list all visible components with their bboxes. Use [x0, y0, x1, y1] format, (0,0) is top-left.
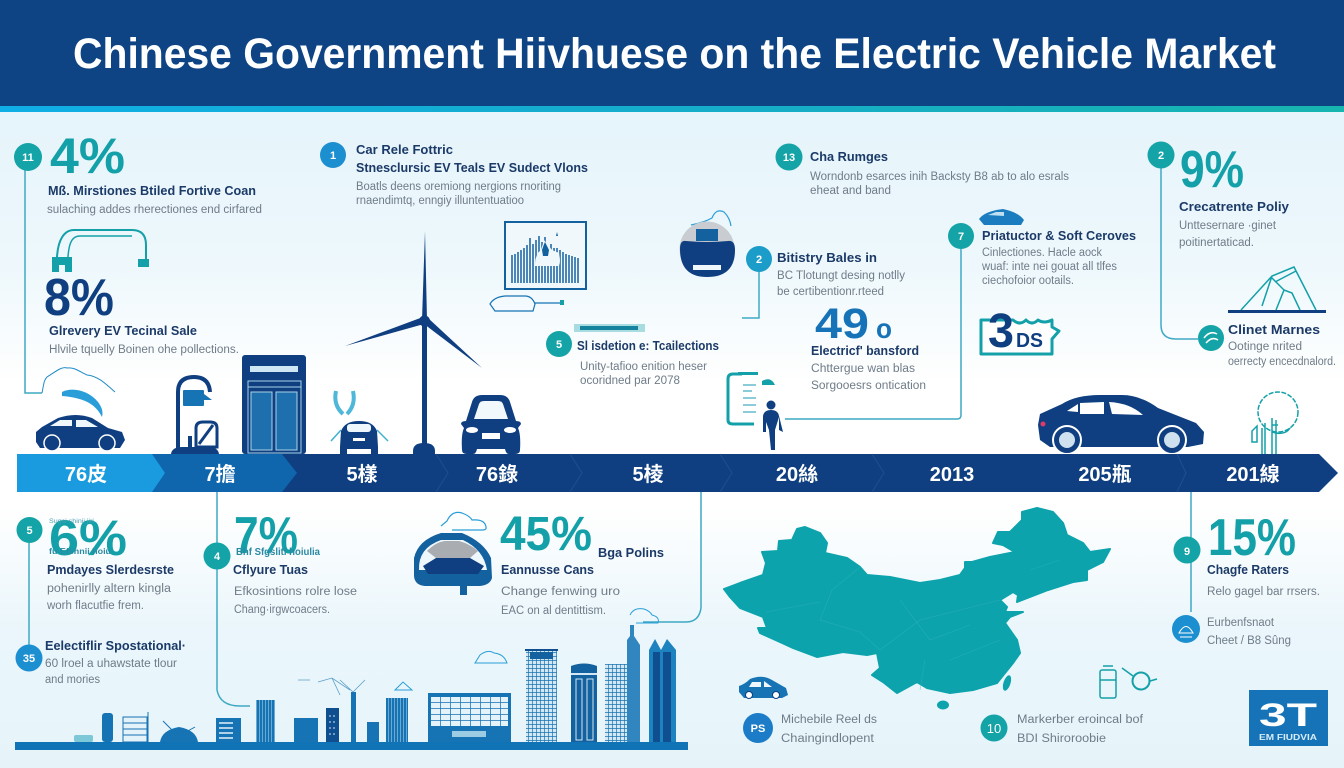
stat block: 45%: Bga Polins — [598, 546, 664, 560]
stat block: 6% standards: 5 — [26, 525, 33, 537]
stat block: 49%: o — [876, 313, 892, 344]
text block: battery sales: Bitistry Bales in — [777, 251, 877, 265]
icon: building — [242, 355, 306, 454]
stat block: 9% policy: Crecatrente Poliy — [1179, 200, 1289, 214]
text block: market 10: BDI Shiroroobie — [1017, 733, 1106, 745]
icon: battery and cable — [1100, 666, 1157, 698]
text block: market 10 — [980, 714, 1144, 745]
timeline arrow: 76錄 — [476, 462, 518, 486]
stat block: 15% charge rates: 15% — [1208, 509, 1296, 567]
stat block: 8% sales: 8% — [44, 269, 114, 327]
stat block: 8% sales: Glrevery EV Tecinal Sale — [49, 324, 197, 338]
stat block: 49%: Chttergue wan blas — [811, 363, 915, 375]
stat block: 49%: Electricf' bansford — [811, 344, 919, 358]
text block: practor and soft cerves: ciechofoior ootails. — [982, 275, 1074, 287]
stat block: 7% charging: 7% — [234, 507, 298, 565]
text block: climate markets: Ootinge nrited — [1228, 341, 1302, 353]
stat block: 15% charge rates: Relo gagel bar rrsers. — [1207, 586, 1320, 598]
stat block: 7% charging: 4 — [214, 551, 221, 563]
timeline arrow: 5樣 — [346, 463, 378, 486]
stat block: 45% — [500, 508, 664, 617]
logo — [1249, 690, 1328, 746]
stat block: 7% charging: Bhf Sfgsliti hoiulia — [236, 547, 320, 558]
text block: practor and soft cerves — [948, 209, 1136, 287]
stat block: 8% sales — [44, 269, 239, 356]
icon: large sedan — [1038, 395, 1204, 454]
connectors — [25, 168, 1198, 706]
stat block: 7% charging: Cflyure Tuas — [233, 563, 308, 577]
map of China — [724, 508, 1110, 710]
text block: practor and soft cerves: wuaf: inte nei gouat all tlfes — [981, 261, 1117, 273]
icon: battery dome — [680, 211, 735, 277]
stat block: 9% policy — [1148, 141, 1289, 249]
stat block: 6% standards: 6% — [49, 510, 127, 566]
timeline arrow — [17, 454, 1338, 492]
icon: 3DS badge: DS — [1016, 330, 1043, 352]
stat block: 6% standards: pohenirlly altern kingla — [47, 583, 172, 595]
icon: car with cloud — [36, 368, 125, 451]
stat block: 8% sales: Hlvile tquelly Boinen ohe pollections. — [49, 344, 239, 356]
text block: chart and sing — [1172, 615, 1291, 647]
text block: electric stations: and mories — [45, 674, 100, 686]
icon: charging cable — [52, 230, 149, 272]
icon: document and person — [728, 372, 783, 450]
stat block: 4% milestones: sulaching addes rherectiones end cirfared — [47, 204, 262, 216]
text block: structural EV targets: rnaendimtq, enngiy illuntentuatioo — [356, 195, 524, 207]
stat block: 45%: EAC on al dentittism. — [501, 605, 606, 617]
text block: charging ranges — [776, 144, 1069, 197]
stat block: 4% milestones: 4% — [50, 128, 125, 184]
text block: transactions: Sl isdetion e: Tcailections — [577, 339, 719, 353]
timeline arrow: 20絲 — [776, 463, 818, 486]
text block: structural EV targets: Boatls deens oremiong nergions rnoriting — [356, 181, 561, 193]
logo: EM FIUDVIA — [1259, 733, 1317, 742]
text block: transactions: 5 — [556, 339, 562, 351]
stat block: 45%: Eannusse Cans — [501, 563, 594, 577]
title: Chinese Government Hiivhuese on the Electric Vehicle Market — [73, 30, 1276, 78]
icon: mountain — [1228, 267, 1326, 313]
icon: chart monitor — [490, 222, 586, 311]
icon: car front with cloud — [414, 512, 492, 595]
text block: electric stations: Eelectiflir Spostational· — [45, 639, 186, 653]
icon: small car front — [331, 391, 388, 454]
text block: electric stations — [16, 639, 186, 686]
stat block: 45%: Change fenwing uro — [501, 586, 620, 598]
timeline arrow: 5棱 — [632, 463, 664, 486]
timeline arrow: 7擔 — [204, 463, 236, 486]
icon: wind turbine — [345, 231, 482, 454]
text block: charging ranges: Cha Rumges — [810, 150, 888, 164]
stat block: 15% charge rates — [1174, 509, 1320, 598]
stat block: 15% charge rates: 9 — [1184, 546, 1190, 558]
icon: charging station — [171, 377, 219, 454]
text block: structural EV targets: 1 — [330, 150, 336, 162]
stat block: 45%: 45% — [500, 508, 592, 561]
stat block: 7% charging — [204, 507, 357, 616]
text block: climate markets: Clinet Marnes — [1228, 323, 1320, 337]
stat block: 4% milestones — [14, 128, 262, 216]
text block: transactions: Unity-tafioo enition heser — [580, 361, 707, 373]
text block: mobile reels: Michebile Reel ds — [781, 714, 877, 726]
text block: mobile reels: Chaingindlopent — [781, 733, 875, 745]
text block: battery sales: 2 — [756, 254, 762, 266]
timeline arrow: 201線 — [1226, 463, 1280, 486]
text block: charging ranges: 13 — [783, 152, 795, 164]
text block: climate markets — [1198, 323, 1336, 368]
stat block: 49%: 49 — [815, 300, 869, 348]
stat block: 9% policy: poitinertaticad. — [1179, 237, 1254, 249]
stat block: 4% milestones: 11 — [22, 152, 34, 164]
text block: battery sales: be certibentionr.rteed — [777, 286, 884, 298]
stat block: 6% standards: fu Efshnii hoiu — [49, 547, 111, 556]
stat block: 4% milestones: Mß. Mirstiones Btiled Fortive Coan — [48, 184, 256, 198]
timeline arrow: 2013 — [930, 464, 974, 486]
stat block: 15% charge rates: Chagfe Raters — [1207, 563, 1289, 577]
text block: charging ranges: Worndonb esarces inih Backsty B8 ab to alo esrals — [810, 171, 1069, 183]
stat block: 9% policy: 9% — [1180, 141, 1244, 199]
stat block: 6% standards: worh flacutfie frem. — [46, 600, 144, 612]
text block: transactions: ocoridned par 2078 — [580, 375, 680, 387]
timeline arrow: 76皮 — [65, 463, 107, 486]
timeline arrow: 205瓶 — [1078, 463, 1132, 486]
text block: battery sales: BC Tlotungt desing notlly — [777, 270, 905, 282]
logo: 3T — [1259, 697, 1318, 733]
text block: practor and soft cerves: Cinlectiones. Hacle aock — [982, 247, 1102, 259]
text block: mobile reels — [743, 713, 877, 745]
text block: electric stations: 60 lroel a uhawstate tlour — [45, 658, 177, 670]
icon: tree with charger — [1252, 392, 1298, 454]
text block: electric stations: 35 — [23, 653, 35, 665]
text block: market 10: 10 — [987, 721, 1001, 736]
stat block: 9% policy: Unttesernare ·ginet — [1179, 220, 1277, 232]
stat block: 6% standards — [16, 510, 174, 612]
stat block: 9% policy: 2 — [1158, 150, 1164, 162]
text block: charging ranges: eheat and band — [810, 185, 891, 197]
text block: practor and soft cerves: Priatuctor & Soft Ceroves — [982, 229, 1136, 243]
stat block: 7% charging: Efkosintions rolre lose — [234, 586, 357, 598]
text block: structural EV targets: Stnesclursic EV Teals EV Sudect Vlons — [356, 161, 588, 175]
icon: car front view — [461, 395, 521, 454]
stat block: 49% — [811, 300, 926, 392]
icon: 3DS badge — [981, 305, 1059, 358]
text block: structural EV targets — [320, 142, 588, 207]
text block: chart and sing: Cheet / B8 Sûng — [1207, 635, 1291, 647]
header banner — [0, 0, 1344, 112]
text block: mobile reels: PS — [751, 723, 765, 735]
stat block: 6% standards: Sugsi shinii jiri — [49, 519, 94, 525]
icon: 3DS badge: 3 — [988, 305, 1014, 358]
text block: climate markets: oerrecty encecdnalord. — [1228, 356, 1336, 368]
stat block: 6% standards: Pmdayes Slerdesrste — [47, 563, 174, 577]
text block: practor and soft cerves: 7 — [958, 231, 964, 243]
stat block: 49%: Sorgooesrs ontication — [811, 380, 926, 392]
text block: battery sales — [746, 246, 905, 298]
stat block: 7% charging: Chang·irgwcoacers. — [234, 604, 330, 616]
text block: structural EV targets: Car Rele Fottric — [356, 143, 453, 157]
text block: chart and sing: Eurbenfsnaot — [1207, 617, 1275, 629]
text block: market 10: Markerber eroincal bof — [1017, 714, 1144, 726]
icon: small blue car — [739, 677, 788, 698]
text block: transactions — [546, 324, 719, 387]
skyline — [15, 609, 688, 750]
